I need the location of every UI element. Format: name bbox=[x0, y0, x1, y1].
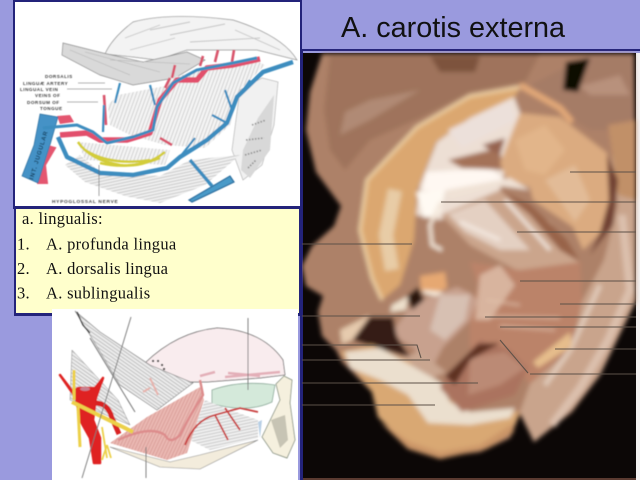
hypoglossal nerve bbox=[78, 142, 165, 166]
panel: lingual vessels drawing bbox=[13, 0, 302, 209]
styloglossus muscle bbox=[62, 43, 205, 85]
leader lines bbox=[82, 317, 248, 478]
sublingual gland bbox=[212, 383, 275, 408]
floor muscle bbox=[440, 340, 528, 412]
panel: dissection photograph bbox=[300, 51, 640, 480]
right skin flap bbox=[525, 56, 634, 130]
title rule bbox=[300, 49, 640, 51]
drawing labels: LINGUAL VEIN bbox=[20, 87, 59, 92]
list text: a. lingualis: bbox=[22, 209, 103, 228]
hyoglossus pink bbox=[110, 387, 204, 460]
mouth cavity bbox=[353, 317, 410, 357]
drawing labels: LINGUÆ ARTERY bbox=[23, 81, 68, 86]
mandible texture bbox=[241, 95, 274, 178]
list text: A. dorsalis lingua bbox=[46, 259, 169, 278]
teeth bbox=[420, 272, 447, 295]
facial vein stump bbox=[189, 176, 234, 202]
internal jugular vein bbox=[22, 114, 58, 183]
list text: A. sublingualis bbox=[46, 284, 150, 302]
panel: sublingual drawing bbox=[52, 309, 298, 480]
cut edge: orange band bbox=[360, 88, 520, 300]
tongue bbox=[394, 287, 478, 378]
lingual veins bbox=[43, 58, 257, 143]
drawing labels: VEINS OF bbox=[35, 93, 60, 98]
list text: A. profunda lingua bbox=[46, 234, 177, 254]
mandible bbox=[262, 376, 295, 458]
hyoglossus muscle bbox=[108, 60, 265, 148]
leader lines bbox=[67, 83, 112, 196]
drawing labels bbox=[20, 74, 118, 205]
common carotid artery bbox=[36, 146, 55, 183]
list text: 3. bbox=[17, 284, 30, 302]
styloglossus bbox=[75, 311, 193, 410]
lingual artery branches bbox=[118, 380, 203, 440]
tongue dorsum bbox=[105, 16, 297, 60]
external carotid artery bbox=[60, 375, 103, 463]
panel: lingual vessels drawing: INT. JUGULAR bbox=[29, 130, 50, 181]
lower jaw bbox=[340, 345, 520, 458]
title: A. carotis externa bbox=[341, 12, 566, 44]
nerve bbox=[74, 370, 80, 447]
list text: 1. bbox=[17, 234, 30, 254]
drawing labels: DORSALIS bbox=[45, 74, 73, 79]
papilla dots bbox=[153, 361, 166, 373]
digastric muscle bbox=[441, 190, 580, 282]
list text bbox=[17, 209, 177, 302]
drawing labels: TONGUE bbox=[40, 106, 63, 111]
photo leader lines bbox=[302, 172, 636, 405]
panel: a. lingualis branches list bbox=[14, 209, 302, 316]
drawing labels: HYPOGLOSSAL NERVE bbox=[52, 199, 118, 205]
head skin bbox=[302, 54, 636, 457]
tongue body bbox=[145, 328, 285, 382]
lingual artery bbox=[60, 59, 260, 140]
lower muscles bbox=[70, 350, 130, 425]
deep structures bbox=[470, 262, 582, 384]
drawing labels: DORSUM OF bbox=[27, 100, 60, 105]
interior: white tendons bbox=[416, 97, 520, 220]
large gland bbox=[500, 113, 609, 250]
list text: 2. bbox=[17, 259, 30, 278]
